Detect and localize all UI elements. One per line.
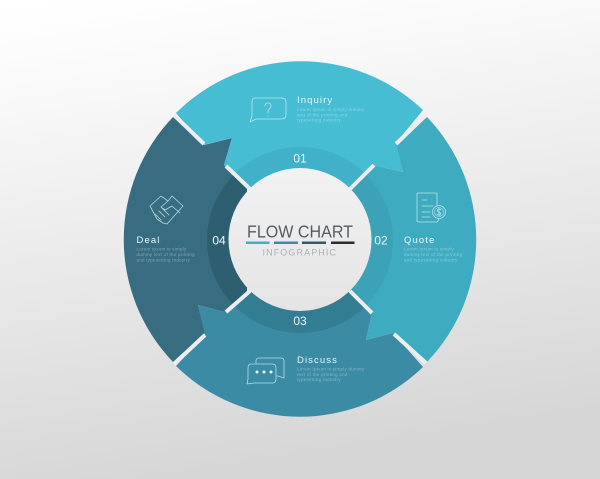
- text: discuss: typesetting industry: [297, 377, 341, 382]
- color bars: [246, 242, 354, 244]
- step numbers: [212, 152, 388, 328]
- text: inquiry: Inquiry: [297, 95, 333, 106]
- icon: question speech bubble: [250, 98, 286, 122]
- step numbers: 02: [374, 234, 388, 248]
- icon: handshake: [150, 196, 183, 224]
- icon: discuss chat bubbles: [247, 358, 284, 384]
- text: inquiry: Lorem Ipsum is simply dummy: [297, 107, 365, 112]
- text: deal: dummy text of the printing: [136, 252, 195, 257]
- text: discuss: Discuss: [297, 355, 338, 366]
- text: discuss: [297, 355, 365, 382]
- step numbers: 03: [293, 314, 307, 328]
- segment gaps: [174, 115, 426, 364]
- panel: quote segment: [350, 117, 476, 362]
- panel: deal segment: [124, 117, 247, 362]
- text: quote: dummy text of the printing: [404, 252, 463, 257]
- text: deal: [136, 235, 195, 262]
- icon: quote document with dollar: [417, 193, 446, 222]
- text: deal: and typesetting industry: [136, 258, 191, 262]
- step numbers: 01: [293, 152, 307, 166]
- text: inquiry: [297, 95, 365, 122]
- center circle: [228, 168, 372, 311]
- text: inquiry: typesetting industry: [297, 118, 341, 122]
- text: discuss: text of the printing and: [297, 372, 348, 377]
- step numbers: 04: [212, 234, 226, 248]
- subtitle: INFOGRAPHIC: [262, 248, 336, 258]
- text: discuss: Lorem Ipsum is simply dummy: [297, 366, 365, 372]
- text: quote: and typesetting industry: [404, 258, 458, 262]
- text: quote: [404, 235, 463, 262]
- text: deal: Deal: [136, 235, 160, 246]
- text: inquiry: text of the printing and: [297, 112, 348, 118]
- text: quote: Quote: [404, 235, 435, 246]
- panel: discuss segment: [176, 292, 423, 417]
- panel: inquiry segment: [176, 61, 423, 188]
- icon: three dots: [256, 370, 272, 374]
- text: quote: Lorem Ipsum is simply: [404, 246, 454, 252]
- title: FLOW CHART: [247, 222, 353, 242]
- text: deal: Lorem Ipsum is simply: [136, 246, 187, 252]
